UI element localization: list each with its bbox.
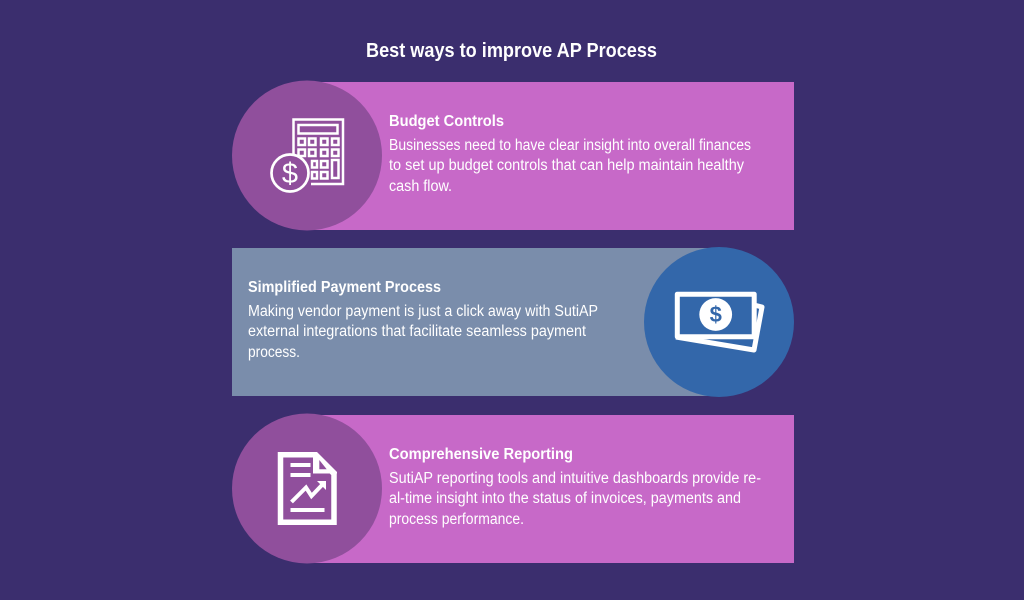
body text: Businesses need to have clear insight into overall finances [389,137,751,154]
body text: to set up budget controls that can help maintain healthy [389,157,744,174]
panel background [232,248,722,396]
title: Best ways to improve AP Process [366,39,657,62]
icon: banknotes: $ [710,302,722,327]
circle [644,247,794,397]
icon: calculator with dollar coin [272,120,343,192]
body text: process. [248,344,300,361]
body text: Making vendor payment is just a click away with SutiAP [248,303,598,320]
icon: report document with chart [280,452,337,522]
body text [248,303,598,361]
body text [389,470,761,528]
panel background [300,82,794,230]
body text: process performance. [389,511,524,528]
heading: Simplified Payment Process [248,279,441,296]
body text: SutiAP reporting tools and intuitive dashboards provide re- [389,470,761,487]
body text: al-time insight into the status of invoices, payments and [389,490,741,507]
panel: budget controls [232,80,794,230]
body text: external integrations that facilitate seamless payment [248,323,587,340]
heading: Comprehensive Reporting [389,446,573,463]
body text [389,137,751,195]
panel: budget controls: $ [282,158,298,190]
icon: banknotes [676,294,762,350]
panel: simplified payment process [232,247,794,397]
body text: cash flow. [389,178,452,195]
panel: comprehensive reporting [232,414,794,564]
panel background [300,415,794,563]
circle [232,80,382,230]
heading: Budget Controls [389,113,504,130]
circle [232,414,382,564]
